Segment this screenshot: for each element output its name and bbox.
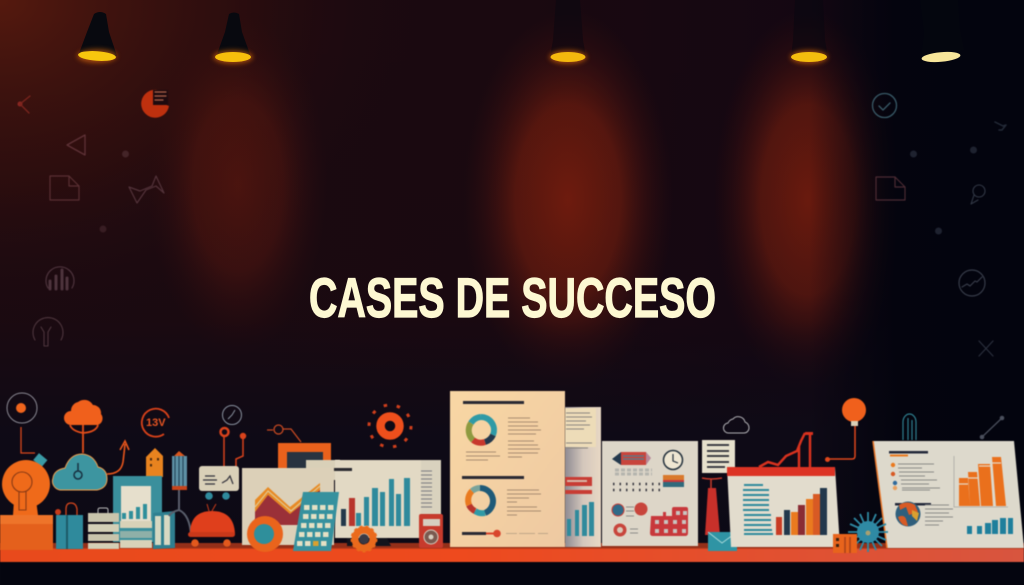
icon: column stand xyxy=(169,451,191,536)
icon: connector line xyxy=(980,416,1004,439)
icon: sun gear xyxy=(369,405,411,447)
doc: main report xyxy=(450,391,565,547)
doc: icon sheet xyxy=(602,441,698,546)
chart: donut top xyxy=(469,417,494,443)
dot xyxy=(100,226,106,232)
icon: server stack xyxy=(88,508,152,549)
lamp 2 xyxy=(213,12,253,64)
chart: donut bottom xyxy=(468,488,493,513)
icon: gear xyxy=(352,526,376,552)
icon: blue binder xyxy=(153,511,175,549)
icon: bar gauge xyxy=(46,267,74,289)
icon: compass xyxy=(222,406,242,424)
icon: orange frame xyxy=(278,443,331,471)
icon: document xyxy=(876,177,905,200)
icon: cross xyxy=(979,341,993,356)
icon: chart label xyxy=(199,466,239,491)
icon: red pins xyxy=(220,428,246,466)
icon: check circle xyxy=(872,94,896,118)
icon: calculator xyxy=(293,492,339,551)
dot xyxy=(122,150,129,158)
chart card xyxy=(727,432,840,547)
lamp 1 xyxy=(77,12,117,63)
right object cluster xyxy=(702,398,1024,553)
icon: small arrow xyxy=(995,122,1006,130)
icon: paper clip xyxy=(903,414,916,440)
left object cluster xyxy=(0,393,331,550)
icon: target circle with connector xyxy=(7,393,37,453)
icon: orange lightbulb on box xyxy=(0,453,53,550)
icon: bulb gauge xyxy=(33,318,63,346)
icon: connector node xyxy=(267,425,301,442)
icon: teal spiky gear xyxy=(848,512,888,552)
dot xyxy=(935,228,942,234)
icon: share node xyxy=(18,96,30,113)
chart paper with area chart xyxy=(242,460,340,545)
big report card xyxy=(873,441,1024,548)
icon: cloud outline xyxy=(723,417,749,433)
icon: teal bag xyxy=(55,503,83,549)
bar chart panel xyxy=(334,460,441,546)
icon: note xyxy=(702,440,735,473)
lamp 3 xyxy=(549,0,587,64)
lamp 5 xyxy=(920,0,964,63)
lamp 4 xyxy=(790,0,828,64)
icon: teal dots xyxy=(205,492,230,500)
icon: 13V badge: 13V xyxy=(146,417,166,429)
title: CASES DE SUCCESO xyxy=(309,266,716,329)
right wall icons xyxy=(872,94,1006,356)
left wall icons xyxy=(18,90,169,346)
icon: orange cloud xyxy=(64,400,103,453)
icon: 13V badge xyxy=(142,409,169,437)
icon: orange report pie xyxy=(141,90,169,118)
icon: envelope xyxy=(708,532,737,551)
dot xyxy=(910,150,917,158)
icon: route xyxy=(129,176,164,203)
icon: triangle xyxy=(67,135,85,155)
icon: small orange block xyxy=(833,534,857,553)
icon: teal framed chart xyxy=(113,476,162,542)
icon: red tall stand xyxy=(702,478,722,535)
icon: bulb with wire xyxy=(825,398,866,462)
icon: red device xyxy=(419,514,443,548)
floor shelf xyxy=(0,543,1024,585)
icon: orange tower xyxy=(146,448,163,477)
icon: orange ball xyxy=(247,516,283,552)
icon: pin xyxy=(971,185,985,204)
icon: document xyxy=(50,176,79,200)
dot xyxy=(970,146,977,154)
icon: trend circle xyxy=(959,270,985,296)
doc: back report xyxy=(565,407,601,547)
icon: red dome xyxy=(188,504,235,547)
icon: teal cloud xyxy=(52,441,129,490)
